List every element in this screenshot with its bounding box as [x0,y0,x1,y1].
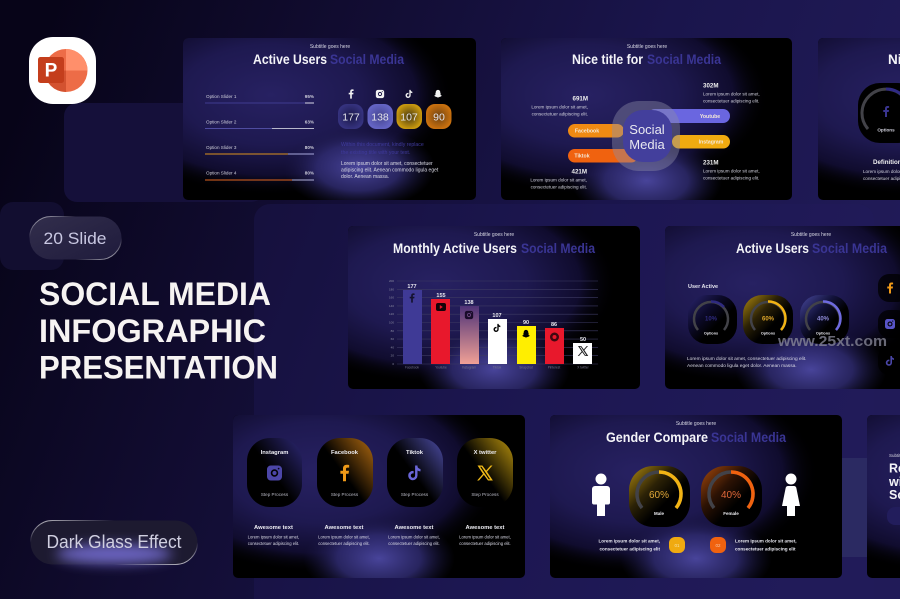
card captions: Awesome text [466,525,505,531]
icon chip [887,507,900,525]
male note: Lorem ipsum dolor sit amet, [598,538,660,544]
icon: female figure [782,474,800,516]
stat boxes: 138 [371,112,389,124]
slider 2 [205,120,314,129]
category labels: X twitter [577,366,590,370]
PowerPoint app icon [29,37,96,104]
stat 302M: 302M [703,82,718,90]
stat 302M [703,82,760,104]
hub label [629,122,665,152]
stat 421M [530,168,587,190]
subtitle: Subtitle goes here [676,421,716,427]
gauge: female 40% [701,466,762,527]
inner blue blob [623,110,672,162]
user active label: User Active [688,284,718,290]
panel: monthly active users bar chart slide [348,226,640,389]
gauge: female 40%: 40% [721,490,741,501]
slider 1: Option Slider 1 [206,94,237,99]
card: Facebook: Step Process [331,492,359,497]
social media hub diagram [568,101,730,171]
badge 01: 01 [674,543,680,548]
bar chart: 0 [392,362,394,366]
body text: Lorem ipsum dolor sit amet, consectetuer [341,161,433,167]
panel: cropped slide [867,415,900,578]
bar chart: 140 [389,304,394,308]
slider 1 [205,94,314,104]
stat 691M: consectetuer adipiscing elit. [532,112,588,116]
purple note: Within this document, kindly replace [341,142,424,148]
badge: Dark Glass Effect [30,520,198,564]
card: Facebook: Facebook [331,450,359,456]
female note: consectetuer adipiscing elit [735,546,796,552]
male note [598,538,660,552]
heading: Active Users [253,52,327,67]
body text: Aenean commodo ligula eget dolor. Aenean massa. [687,363,797,369]
pill: Tiktok [568,149,638,162]
subtitle: Subtitle goes here [791,232,831,238]
icon: male figure [592,474,610,516]
icon row [349,89,442,99]
bar chart: 20 [391,354,394,358]
bar chart: 80 [391,329,394,333]
stat boxes: 177 [342,112,360,124]
slider 4 [205,170,314,180]
stat 302M: consectetuer adipiscing elit. [703,98,759,104]
card captions: Lorem ipsum dolor sit amet, [388,534,440,540]
card: Tiktok: Step Process [401,492,429,497]
card captions: Lorem ipsum dolor sit amet, [248,534,299,540]
stat 421M: Lorem ipsum dolor sit amet, [530,178,587,182]
badge 01 [669,537,685,553]
bar values: 50 [580,337,586,343]
bar values: 107 [492,313,502,319]
bar chart: 100 [389,320,394,324]
outer glass blob [612,101,680,171]
bar values: 177 [407,284,417,290]
heading: Social Media [521,241,595,256]
card captions: Awesome text [254,525,293,531]
card: X twitter [457,438,513,507]
bar chart: 120 [389,312,394,316]
hub label: Media [629,137,665,152]
slider 3 [205,145,314,154]
card: Tiktok [387,438,443,507]
card: X twitter: Step Process [471,492,499,497]
gauge card: Options [877,128,895,132]
gauge 10%: 10% [705,316,718,322]
gauge 40%: 40% [817,316,830,322]
card captions: Awesome text [395,525,434,531]
card captions: consectetuer adipiscing elit. [388,541,440,546]
bar values: 86 [551,322,557,328]
category labels: Snapchat [519,366,533,370]
stat 231M: consectetuer adipiscing elit. [703,176,759,180]
pill labels [574,114,724,160]
slider 3: 80% [305,145,314,150]
gauge: female 40%: Female [723,511,739,516]
pill: Facebook [568,124,624,138]
stat 421M: 421M [572,168,587,176]
main title: SOCIAL MEDIA [39,276,271,312]
main title: PRESENTATION [39,350,278,386]
card: Tiktok: Tiktok [406,450,424,456]
side icon: instagram [878,310,900,338]
body text: dolor. Aenean massa. [341,174,389,180]
heading: Gender Compare [606,430,708,445]
heading [736,241,887,256]
category labels: Youtube [435,366,447,370]
heading: Social Media [647,52,721,67]
bar values: 90 [523,320,529,326]
pill labels: Instagram [699,140,724,146]
subtitle: Subtitle goes here [627,44,667,50]
panel: step process slide [233,415,525,578]
bar chart: 60 [391,337,394,341]
stat boxes: 90 [433,112,445,124]
main title [39,276,278,386]
body text [687,356,806,369]
gauge 60%: Options [761,332,775,336]
slider 4: Option Slider 4 [206,170,237,176]
pill labels: Youtube [700,114,720,120]
card captions: Lorem ipsum dolor sit amet, [318,534,370,540]
heading [253,52,404,67]
heading [572,52,721,67]
bar icons [410,293,588,356]
pill: Instagram [672,135,730,148]
stat 421M: consectetuer adipiscing elit. [531,184,587,190]
heading: Social Media [812,241,887,256]
hub label: Social [629,122,665,137]
heading [393,241,595,256]
stat 231M: 231M [703,160,718,166]
card captions: consectetuer adipiscing elit. [248,541,299,546]
pill labels: Facebook [575,128,599,134]
panel: active users sliders slide [183,38,476,200]
side icon: tiktok [878,347,900,375]
card captions: Awesome text [325,525,364,531]
gauge 40% [800,295,849,344]
card: Instagram [247,438,302,507]
heading [888,462,900,502]
card: Instagram: Instagram [261,450,288,456]
slider 2: 63% [305,120,314,124]
card: Instagram: Step Process [261,492,289,497]
panel: user active gauges slide [665,226,900,389]
gauge 40%: Options [816,332,830,336]
badge: 20 Slide [30,216,122,260]
gauge 10% [688,295,737,344]
slider 2: Option Slider 2 [206,120,237,124]
panel: gender compare slide [550,415,842,578]
stat 691M: Lorem ipsum dolor sit amet, [531,104,588,110]
card captions: Lorem ipsum dolor sit amet, [459,534,511,540]
category labels: Tiktok [493,366,502,370]
side icon: facebook [878,274,900,302]
bar values [407,284,586,343]
gauge 10%: Options [704,332,718,336]
heading [606,430,786,445]
bars [403,290,592,364]
card captions: consectetuer adipiscing elit. [459,541,511,546]
card captions: consectetuer adipiscing elit. [318,541,370,546]
category labels [405,366,590,370]
heading: Social Media [330,52,404,67]
background glass panel centre [254,204,874,599]
badge: 20 Slide: 20 Slide [44,229,106,248]
gauge card [858,83,900,143]
body text [341,161,439,180]
gauge: male 60% [629,466,690,527]
stat 302M: Lorem ipsum dolor sit amet, [703,92,760,96]
badge 02: 02 [715,543,721,548]
background glass square left [0,202,64,270]
gauge 60%: 60% [762,316,775,322]
stat 231M: Lorem ipsum dolor sit amet, [703,168,760,174]
male note: consectetuer adipiscing elit [599,546,660,552]
main title: INFOGRAPHIC [39,313,266,349]
category labels: Instagram [462,366,476,370]
badge: Dark Glass Effect: Dark Glass Effect [46,532,182,552]
stat 691M [531,96,588,116]
pill: Youtube [648,109,730,123]
stat boxes [338,104,452,129]
gauge: male 60%: Male [654,511,664,516]
stat 691M: 691M [573,96,588,102]
badge 02 [710,537,726,553]
purple note: the existing title with your text. [341,150,410,156]
stat 231M [703,160,760,180]
body text: adipiscing elit. Aenean commodo ligula eget [341,168,439,174]
heading: Monthly Active Users [393,241,517,256]
slider 3: Option Slider 3 [206,145,237,150]
bar chart: 200 [389,279,394,283]
card: X twitter: X twitter [474,450,497,456]
stat boxes: 107 [400,112,418,124]
bar chart: 40 [391,345,394,349]
panel: cropped options slide [818,38,900,200]
bar values: 138 [464,300,474,306]
bar chart: 160 [389,296,394,300]
background glass panel lower right [830,458,890,557]
subtitle: Subtitle goes here [310,44,350,50]
slider 4: 80% [305,170,314,176]
female note [735,538,797,552]
PowerPoint app icon: P [45,60,58,82]
purple note [341,142,424,156]
heading: Active Users [736,241,809,256]
definition text [863,159,900,181]
panel: nice title slide [501,38,792,200]
gauge: male 60%: 60% [649,490,669,501]
category labels: Pinterest [548,366,560,370]
heading: Social Media [711,430,786,445]
heading: Nice title for [572,52,644,67]
body text: Lorem ipsum dolor sit amet, consectetuer adipiscing elit. [687,356,806,362]
gauge 60% [743,295,793,344]
slider 1: 95% [305,94,314,99]
bar chart: 180 [389,287,394,291]
card captions [248,525,511,546]
bar values: 155 [436,293,446,299]
bar chart [389,279,598,370]
background glass panel upper left [64,103,264,202]
pill labels: Tiktok [574,154,590,160]
female note: Lorem ipsum dolor sit amet, [735,538,797,544]
watermark: www.25xt.com [777,333,887,350]
category labels: Facebook [405,366,419,370]
card: Facebook [317,438,373,507]
subtitle: Subtitle goes here [474,232,514,238]
